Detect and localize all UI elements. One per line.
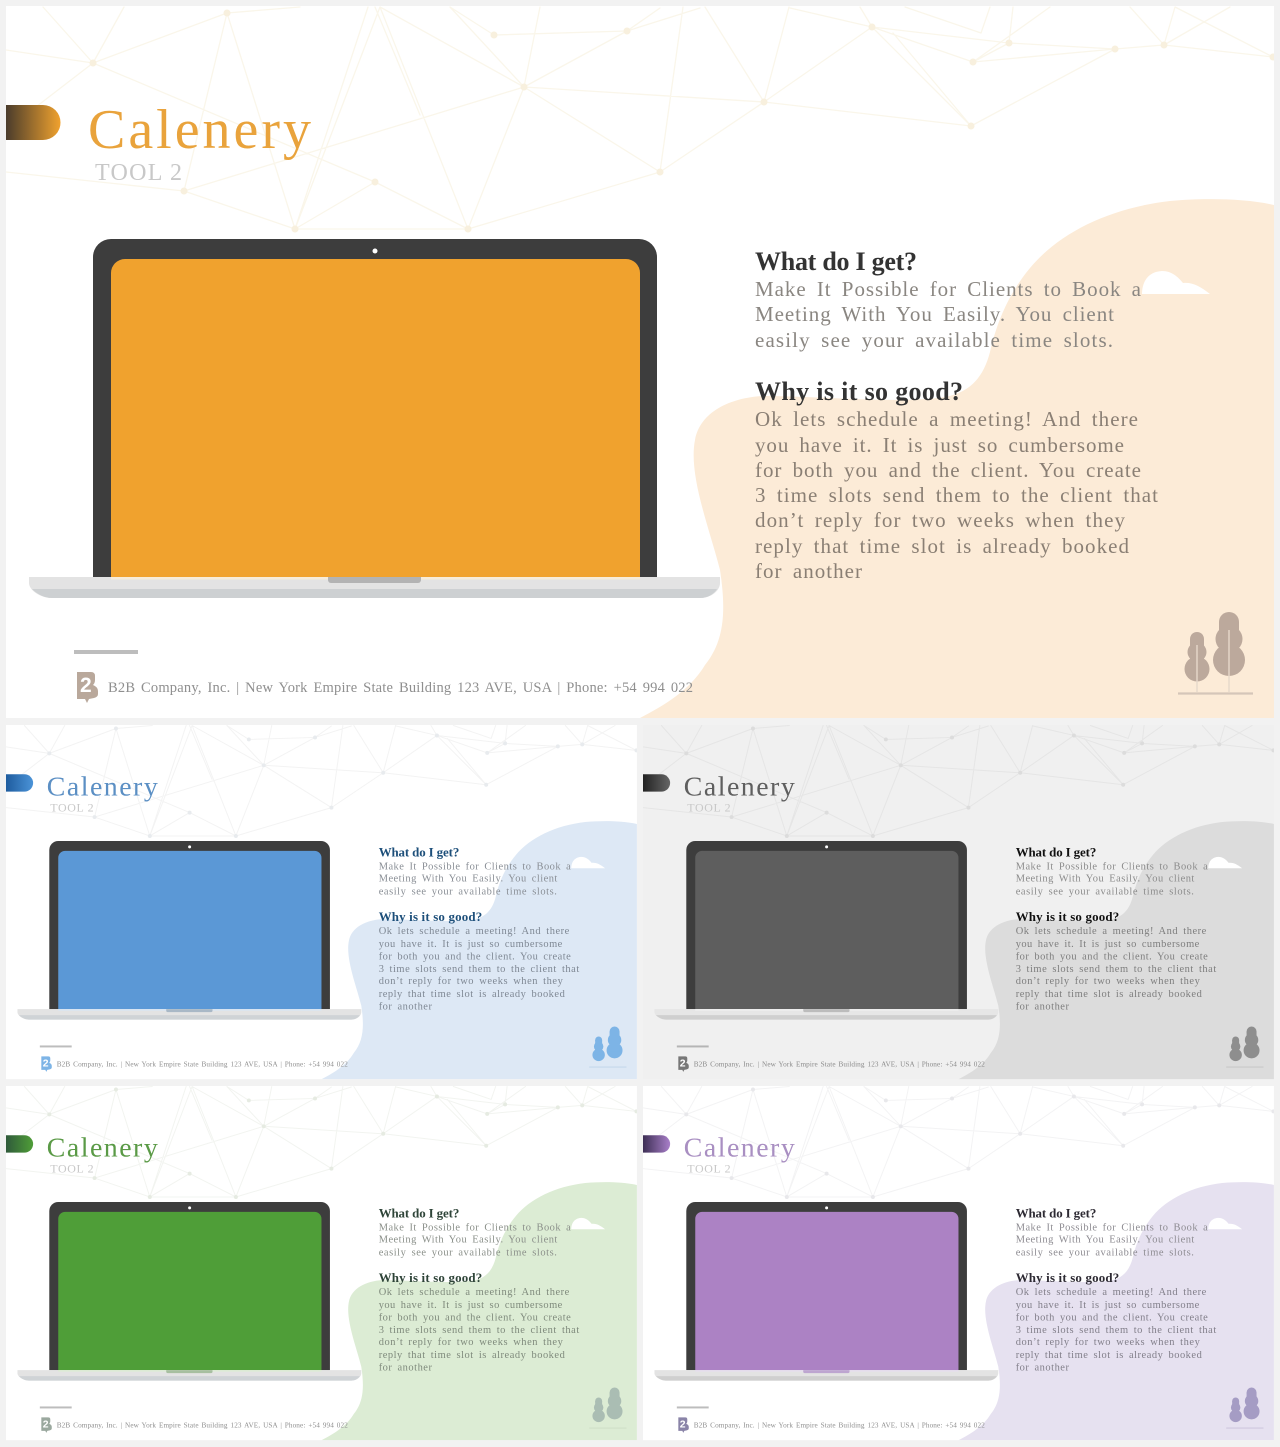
icon: trees bbox=[1178, 612, 1253, 694]
text block: why is it so good: Ok lets schedule a meeting! And there bbox=[1016, 926, 1207, 937]
title: Calenery bbox=[88, 99, 311, 161]
text block: what do I get bbox=[755, 247, 1142, 352]
slide: gray bbox=[643, 725, 1274, 1079]
icon: logo bbox=[41, 1056, 52, 1072]
slide: orange (large) bbox=[6, 6, 1274, 718]
text block: why is it so good: for another bbox=[755, 559, 862, 583]
icon: logo: 2 bbox=[680, 1419, 686, 1430]
text block: what do I get: Make It Possible for Clients to Book a bbox=[755, 277, 1142, 301]
text block: why is it so good: 3 time slots send them to the client that bbox=[755, 483, 1158, 507]
icon: trees bbox=[589, 1388, 627, 1428]
text block: why is it so good: Why is it so good? bbox=[379, 909, 482, 924]
footer bar bbox=[74, 650, 138, 654]
text block: what do I get: Make It Possible for Clients to Book a bbox=[1016, 861, 1208, 872]
text block: why is it so good: you have it. It is just so cumbersome bbox=[755, 433, 1124, 457]
icon: cloud bbox=[1208, 1218, 1242, 1229]
laptop bbox=[17, 841, 361, 1020]
decorative blob bbox=[958, 821, 1274, 1079]
footer text: B2B Company, Inc. | New York Empire State Building 123 AVE, USA | Phone: +54 994 022 bbox=[108, 680, 693, 696]
slide: blue bbox=[6, 725, 637, 1079]
header pill bbox=[643, 774, 670, 792]
text block: why is it so good bbox=[1016, 909, 1216, 1013]
text block: why is it so good: reply that time slot is already booked bbox=[1016, 989, 1203, 1000]
icon: trees bbox=[589, 1027, 627, 1067]
text block: why is it so good: you have it. It is just so cumbersome bbox=[379, 1300, 563, 1311]
text block: what do I get: Meeting With You Easily. You client bbox=[379, 874, 557, 885]
decorative blob bbox=[321, 1182, 637, 1440]
text block: why is it so good: for another bbox=[379, 1002, 432, 1013]
text block: what do I get: Meeting With You Easily. You client bbox=[1016, 1235, 1194, 1246]
icon: logo: 2 bbox=[43, 1419, 49, 1430]
text block: why is it so good: for both you and the client. You create bbox=[379, 951, 571, 962]
text block: what do I get bbox=[1016, 1205, 1208, 1259]
header pill bbox=[6, 774, 33, 792]
text block: why is it so good: for both you and the client. You create bbox=[379, 1312, 571, 1323]
slide: green bbox=[6, 1086, 637, 1440]
text block: what do I get: What do I get? bbox=[755, 247, 917, 276]
text block: what do I get: easily see your available time slots. bbox=[1016, 1248, 1194, 1259]
background network bbox=[6, 725, 636, 836]
icon: trees bbox=[1226, 1388, 1264, 1428]
icon: logo: 2 bbox=[680, 1058, 686, 1069]
text block: what do I get: What do I get? bbox=[379, 844, 459, 859]
text block: what do I get bbox=[1016, 844, 1208, 898]
text block: what do I get: easily see your available time slots. bbox=[379, 1248, 557, 1259]
icon: logo: 2 bbox=[80, 674, 92, 697]
title: Calenery bbox=[684, 1133, 795, 1164]
text block: why is it so good: don’t reply for two weeks when they bbox=[379, 976, 564, 987]
text block: why is it so good: for another bbox=[379, 1363, 432, 1374]
header pill bbox=[6, 105, 60, 140]
subtitle: TOOL 2 bbox=[95, 160, 182, 186]
text block: why is it so good bbox=[1016, 1270, 1216, 1374]
icon: logo: 2 bbox=[43, 1058, 49, 1069]
header pill bbox=[6, 1135, 33, 1153]
text block: what do I get: Make It Possible for Clients to Book a bbox=[379, 1222, 571, 1233]
text block: why is it so good: reply that time slot is already booked bbox=[379, 1350, 566, 1361]
text block: why is it so good: Ok lets schedule a meeting! And there bbox=[755, 407, 1138, 431]
icon: cloud bbox=[571, 1218, 605, 1229]
text block: what do I get: Meeting With You Easily. You client bbox=[379, 1235, 557, 1246]
icon: logo bbox=[41, 1417, 52, 1433]
text block: why is it so good: reply that time slot is already booked bbox=[755, 534, 1130, 558]
text block: why is it so good: for both you and the client. You create bbox=[755, 458, 1141, 482]
text block: why is it so good: for another bbox=[1016, 1363, 1069, 1374]
text block: why is it so good bbox=[379, 1270, 579, 1374]
decorative blob bbox=[640, 199, 1274, 718]
footer text: B2B Company, Inc. | New York Empire State Building 123 AVE, USA | Phone: +54 994 022 bbox=[57, 1060, 348, 1068]
header pill bbox=[643, 1135, 670, 1153]
footer text: B2B Company, Inc. | New York Empire State Building 123 AVE, USA | Phone: +54 994 022 bbox=[57, 1421, 348, 1429]
icon: logo bbox=[678, 1417, 689, 1433]
footer text: B2B Company, Inc. | New York Empire State Building 123 AVE, USA | Phone: +54 994 022 bbox=[694, 1060, 985, 1068]
text block: what do I get bbox=[379, 1205, 571, 1259]
text block: why is it so good: reply that time slot is already booked bbox=[379, 989, 566, 1000]
laptop bbox=[654, 841, 998, 1020]
title: Calenery bbox=[47, 1133, 158, 1164]
footer bar bbox=[677, 1045, 709, 1047]
text block: why is it so good: 3 time slots send them to the client that bbox=[1016, 1325, 1216, 1336]
text block: why is it so good: 3 time slots send them to the client that bbox=[379, 964, 579, 975]
text block: why is it so good: Ok lets schedule a meeting! And there bbox=[379, 926, 570, 937]
text block: why is it so good: Ok lets schedule a meeting! And there bbox=[379, 1287, 570, 1298]
text block: what do I get bbox=[379, 844, 571, 898]
text block: why is it so good: 3 time slots send them to the client that bbox=[379, 1325, 579, 1336]
icon: trees bbox=[1226, 1027, 1264, 1067]
text block: why is it so good: don’t reply for two weeks when they bbox=[1016, 1337, 1201, 1348]
text block: what do I get: easily see your available time slots. bbox=[379, 887, 557, 898]
background network bbox=[6, 1086, 636, 1197]
text block: why is it so good: don’t reply for two weeks when they bbox=[755, 508, 1126, 532]
subtitle: TOOL 2 bbox=[687, 1162, 731, 1176]
decorative blob bbox=[958, 1182, 1274, 1440]
text block: why is it so good: you have it. It is just so cumbersome bbox=[1016, 1300, 1200, 1311]
text block: why is it so good: 3 time slots send them to the client that bbox=[1016, 964, 1216, 975]
text block: what do I get: What do I get? bbox=[379, 1205, 459, 1220]
text block: what do I get: What do I get? bbox=[1016, 1205, 1096, 1220]
text block: why is it so good: Why is it so good? bbox=[1016, 909, 1119, 924]
background network bbox=[643, 725, 1273, 836]
text block: why is it so good: Why is it so good? bbox=[1016, 1270, 1119, 1285]
background network bbox=[6, 7, 1273, 229]
subtitle: TOOL 2 bbox=[50, 801, 94, 815]
text block: why is it so good: for both you and the client. You create bbox=[1016, 1312, 1208, 1323]
text block: why is it so good: reply that time slot is already booked bbox=[1016, 1350, 1203, 1361]
title: Calenery bbox=[47, 772, 158, 803]
laptop bbox=[29, 239, 720, 598]
text block: what do I get: easily see your available time slots. bbox=[755, 328, 1113, 352]
footer bar bbox=[40, 1045, 72, 1047]
text block: why is it so good: Ok lets schedule a meeting! And there bbox=[1016, 1287, 1207, 1298]
text block: why is it so good bbox=[379, 909, 579, 1013]
text block: what do I get: Meeting With You Easily. You client bbox=[755, 302, 1114, 326]
icon: cloud bbox=[1208, 857, 1242, 868]
text block: why is it so good bbox=[755, 377, 1158, 583]
text block: why is it so good: don’t reply for two weeks when they bbox=[1016, 976, 1201, 987]
text block: what do I get: What do I get? bbox=[1016, 844, 1096, 859]
decorative blob bbox=[321, 821, 637, 1079]
text block: why is it so good: Why is it so good? bbox=[379, 1270, 482, 1285]
text block: why is it so good: you have it. It is just so cumbersome bbox=[1016, 939, 1200, 950]
text block: why is it so good: for both you and the client. You create bbox=[1016, 951, 1208, 962]
laptop bbox=[17, 1202, 361, 1381]
text block: what do I get: easily see your available time slots. bbox=[1016, 887, 1194, 898]
text block: what do I get: Make It Possible for Clients to Book a bbox=[379, 861, 571, 872]
footer bar bbox=[40, 1406, 72, 1408]
footer bar bbox=[677, 1406, 709, 1408]
text block: what do I get: Meeting With You Easily. You client bbox=[1016, 874, 1194, 885]
text block: why is it so good: Why is it so good? bbox=[755, 377, 963, 406]
subtitle: TOOL 2 bbox=[687, 801, 731, 815]
title: Calenery bbox=[684, 772, 795, 803]
icon: cloud bbox=[571, 857, 605, 868]
background network bbox=[643, 1086, 1273, 1197]
icon: logo bbox=[77, 672, 98, 703]
footer text: B2B Company, Inc. | New York Empire State Building 123 AVE, USA | Phone: +54 994 022 bbox=[694, 1421, 985, 1429]
laptop bbox=[654, 1202, 998, 1381]
slide: purple bbox=[643, 1086, 1274, 1440]
text block: why is it so good: you have it. It is just so cumbersome bbox=[379, 939, 563, 950]
subtitle: TOOL 2 bbox=[50, 1162, 94, 1176]
icon: logo bbox=[678, 1056, 689, 1072]
text block: why is it so good: don’t reply for two weeks when they bbox=[379, 1337, 564, 1348]
text block: why is it so good: for another bbox=[1016, 1002, 1069, 1013]
text block: what do I get: Make It Possible for Clients to Book a bbox=[1016, 1222, 1208, 1233]
icon: cloud bbox=[1142, 271, 1210, 294]
